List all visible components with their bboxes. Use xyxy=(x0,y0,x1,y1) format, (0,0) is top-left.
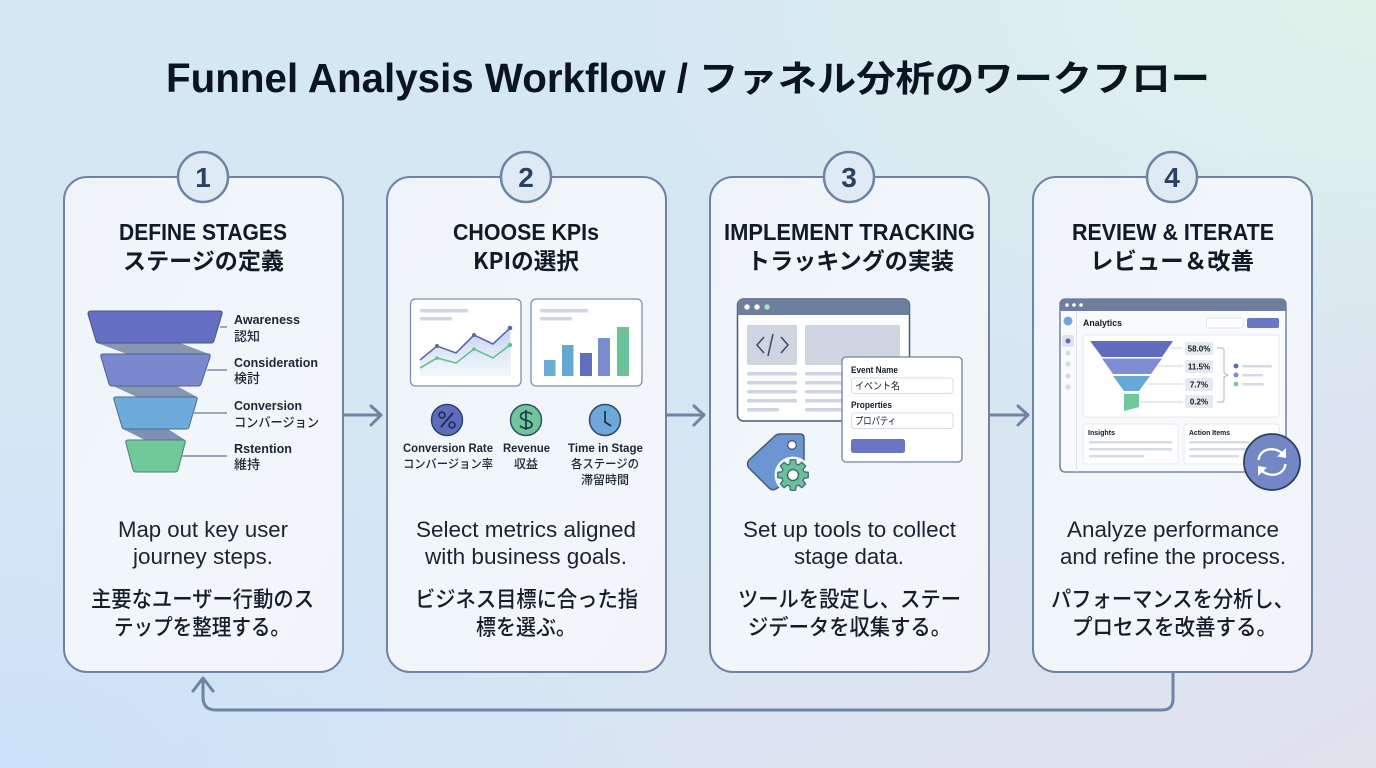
step number 1 xyxy=(178,152,228,202)
description: step 3: ジデータを収集する。 xyxy=(748,610,951,642)
arrow: step 3 to step 4 xyxy=(990,406,1028,425)
heading: review and iterate: REVIEW & ITERATE xyxy=(1072,219,1274,245)
line chart card xyxy=(410,299,521,386)
heading: define stages xyxy=(119,219,287,276)
description: step 2: 標を選ぶ。 xyxy=(476,610,576,642)
funnel stage labels: Consideration xyxy=(234,355,318,370)
icon: refresh xyxy=(1244,434,1300,490)
heading: define stages: ステージの定義 xyxy=(123,242,284,276)
KPI labels: Time in Stage xyxy=(568,441,643,455)
KPI labels: Revenue xyxy=(503,441,550,455)
description: step 3: stage data. xyxy=(794,544,904,569)
heading: implement tracking xyxy=(724,219,975,276)
event form: Event Name xyxy=(851,365,898,376)
bar chart card xyxy=(531,299,642,386)
KPI labels: 収益 xyxy=(514,455,538,472)
description: step 4 xyxy=(1051,517,1294,642)
event form: Properties xyxy=(851,400,892,411)
heading: review and iterate xyxy=(1072,219,1274,276)
panel: step 1 define stages xyxy=(64,152,343,672)
analytics dashboard window: Analytics xyxy=(1083,318,1122,329)
event form: プロパティ xyxy=(855,412,896,428)
arrow: step 1 to step 2 xyxy=(344,406,381,425)
dashboard funnel chart: 11.5% xyxy=(1188,362,1210,372)
step number 4 xyxy=(1147,152,1197,202)
funnel stage labels xyxy=(234,312,319,473)
description: step 4: プロセスを改善する。 xyxy=(1072,610,1277,642)
step number 2: 2 xyxy=(518,162,534,193)
title: ファネル分析のワークフロー xyxy=(699,50,1210,102)
arrow: step 2 to step 3 xyxy=(667,406,704,425)
insights card xyxy=(1083,424,1178,464)
description: step 3 xyxy=(738,517,961,642)
heading: choose KPIs: KPIの選択 xyxy=(473,242,579,276)
description: step 1: Map out key user xyxy=(118,517,288,542)
funnel stage labels: コンバージョン xyxy=(234,412,319,431)
panel: step 4 review and iterate xyxy=(1033,152,1312,672)
funnel stage labels: Rstention xyxy=(234,441,292,456)
arrow: feedback loop from step 4 to step 1 xyxy=(193,673,1173,710)
analytics dashboard window xyxy=(1060,299,1286,472)
description: step 3: ツールを設定し、ステー xyxy=(738,582,961,614)
dashboard funnel chart: 7.7% xyxy=(1190,380,1208,390)
description: step 2: ビジネス目標に合った指 xyxy=(415,582,638,614)
title: Funnel Analysis Workflow / xyxy=(166,55,688,101)
funnel diagram xyxy=(88,311,319,473)
funnel stage labels: Conversion xyxy=(234,398,302,413)
heading: review and iterate: レビュー＆改善 xyxy=(1090,242,1254,276)
heading: choose KPIs: CHOOSE KPIs xyxy=(453,219,599,245)
heading: implement tracking: IMPLEMENT TRACKING xyxy=(724,219,975,245)
funnel stage labels: 検討 xyxy=(234,368,260,387)
action items card: Action Items xyxy=(1189,428,1230,437)
event form: イベント名 xyxy=(855,378,900,392)
heading: implement tracking: トラッキングの実装 xyxy=(747,242,954,276)
step number 3: 3 xyxy=(841,162,857,193)
heading: define stages: DEFINE STAGES xyxy=(119,219,287,245)
KPI labels: コンバージョン率 xyxy=(403,455,493,472)
description: step 2: with business goals. xyxy=(424,544,627,569)
action items card xyxy=(1184,424,1279,464)
description: step 1: journey steps. xyxy=(132,544,273,569)
description: step 3: Set up tools to collect xyxy=(743,517,956,542)
funnel stage labels: Awareness xyxy=(234,312,300,327)
step number 2 xyxy=(501,152,551,202)
description: step 1: テップを整理する。 xyxy=(114,610,290,642)
description: step 1: 主要なユーザー行動のス xyxy=(91,582,314,614)
dashboard funnel chart: 0.2% xyxy=(1190,398,1208,406)
step number 4: 4 xyxy=(1164,162,1180,193)
browser code window xyxy=(738,299,910,421)
KPI labels: 各ステージの xyxy=(571,455,639,472)
KPI labels xyxy=(403,441,643,488)
dashboard funnel chart: 58.0% xyxy=(1188,344,1210,354)
icon: dollar xyxy=(510,404,542,436)
panel: step 3 implement tracking xyxy=(710,152,989,672)
title xyxy=(166,50,1210,102)
icon: tag with gear xyxy=(748,434,812,494)
description: step 2: Select metrics aligned xyxy=(416,517,636,542)
step number 3 xyxy=(824,152,874,202)
funnel stage labels: 維持 xyxy=(234,454,260,473)
description: step 2 xyxy=(415,517,638,642)
KPI labels: 滞留時間 xyxy=(581,471,629,488)
description: step 1 xyxy=(91,517,314,642)
description: step 4: パフォーマンスを分析し、 xyxy=(1051,582,1294,614)
insights card: Insights xyxy=(1088,428,1115,437)
heading: choose KPIs xyxy=(453,219,599,276)
icon: clock xyxy=(590,404,620,436)
dashboard funnel chart xyxy=(1083,335,1279,417)
step number 1: 1 xyxy=(195,162,211,193)
icon: percent xyxy=(432,404,462,436)
KPI labels: Conversion Rate xyxy=(403,441,493,455)
description: step 4: Analyze performance xyxy=(1067,517,1279,542)
description: step 4: and refine the process. xyxy=(1060,544,1286,569)
funnel stage labels: 認知 xyxy=(234,326,260,345)
event form xyxy=(842,357,962,462)
panel: step 2 choose KPIs xyxy=(387,152,666,672)
